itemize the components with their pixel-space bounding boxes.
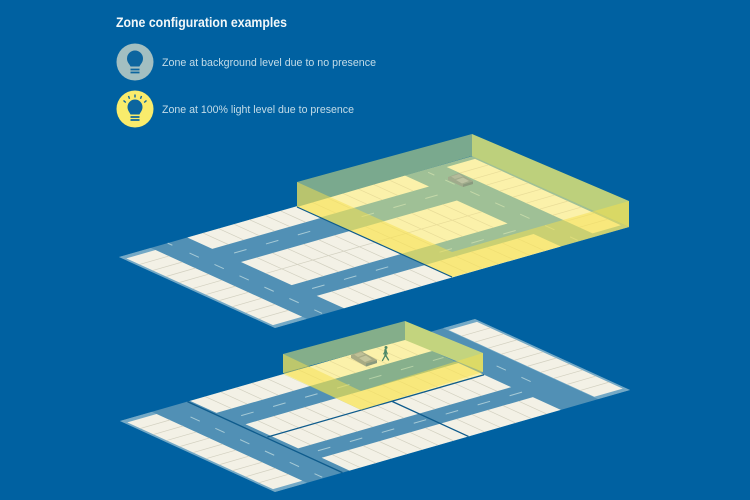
legend: full light level: [116, 90, 354, 128]
upper front-left wall: [297, 182, 452, 277]
lower parking blocks, unlit: [123, 320, 627, 491]
legend label: background level: Zone at background level due to no presence: [162, 57, 376, 69]
diagram: upper zone configuration: [119, 134, 629, 328]
icon: car, lower: [351, 351, 377, 366]
lower back-left wall: [283, 321, 405, 373]
lower road markings: [191, 343, 579, 477]
icon: pedestrian: [382, 346, 388, 360]
icon: car, upper: [448, 173, 473, 187]
legend: background level: [116, 44, 376, 80]
lower front-left wall: [283, 354, 361, 410]
diagram: lower zone configuration: [120, 319, 630, 492]
upper street plate: [119, 156, 629, 328]
upper parking bay lines, lit: [296, 157, 626, 278]
lower street plate: [120, 319, 630, 492]
upper lit floor: [296, 156, 629, 278]
lower parking bay lines, unlit: [123, 320, 627, 491]
upper front-right wall: [452, 201, 629, 277]
legend label: full light level: Zone at 100% light level due to presence: [162, 104, 354, 116]
upper zone boundary: [297, 207, 452, 277]
upper back-right wall: [472, 134, 629, 227]
lower lit floor: [283, 339, 483, 410]
lower front-right wall: [361, 353, 483, 410]
upper back-left wall: [297, 134, 472, 207]
lower parking bay lines, lit: [298, 343, 469, 405]
upper parking blocks, lit: [296, 157, 626, 278]
icon: lit bulb: [116, 90, 154, 128]
lower back-right wall: [405, 321, 483, 372]
title: Zone configuration examples: [116, 15, 287, 30]
upper parking blocks, unlit: [122, 206, 452, 327]
lower parking blocks, lit: [283, 339, 483, 410]
lower zone boundaries: [187, 339, 561, 473]
upper road markings: [168, 214, 426, 313]
upper parking bay lines, unlit: [122, 206, 452, 327]
icon: unlit bulb: [116, 44, 154, 80]
